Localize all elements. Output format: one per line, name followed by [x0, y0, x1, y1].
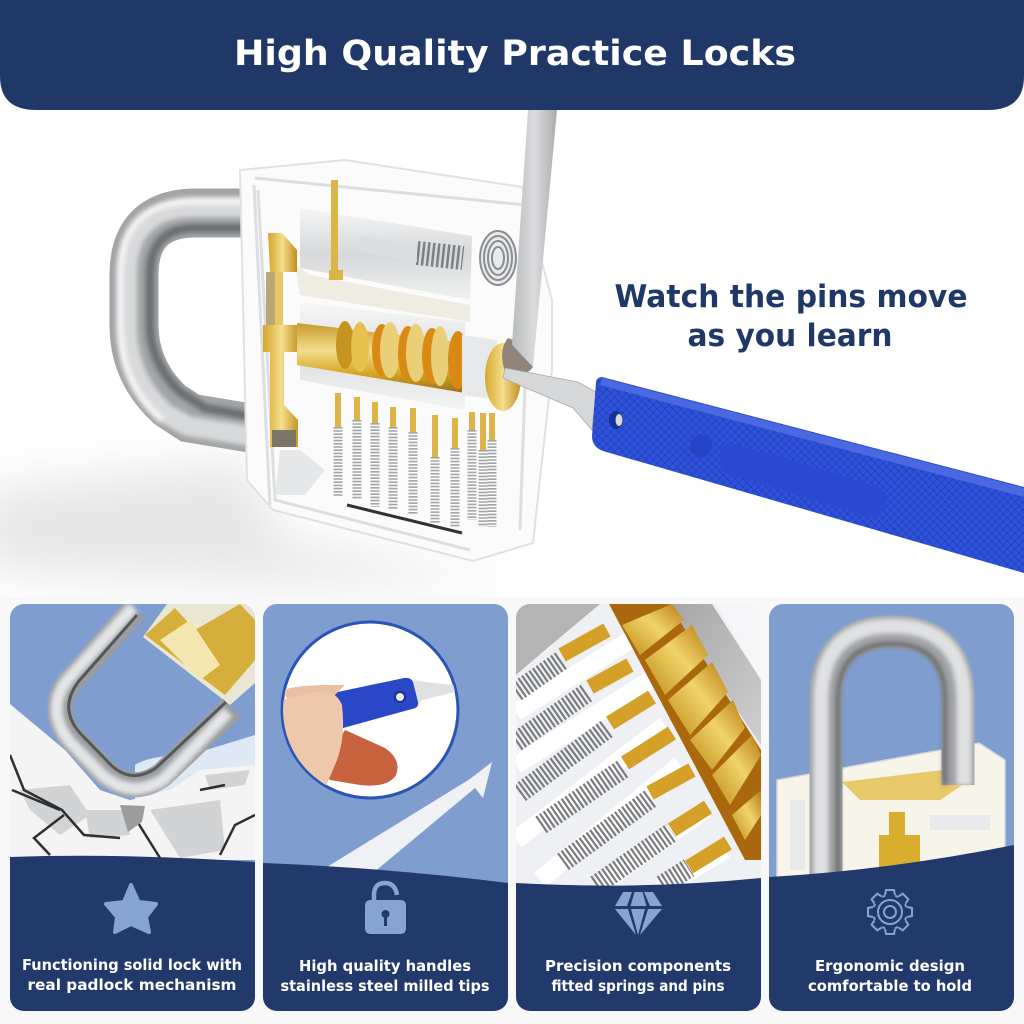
- broken rock: [10, 704, 255, 860]
- caption: ergonomic: [808, 957, 972, 995]
- back finger: [284, 684, 345, 699]
- white stripes: [516, 640, 725, 890]
- icon: gear: [868, 890, 912, 934]
- body inner rim: [254, 178, 530, 550]
- navy base: [263, 863, 508, 1011]
- gold pins: [562, 630, 728, 867]
- handle top highlight: [600, 378, 1024, 497]
- pins and springs: [338, 393, 492, 527]
- navy base: [10, 856, 255, 1011]
- padlock shackle: [120, 201, 250, 436]
- panel: ergonomic: [769, 604, 1014, 1011]
- cylinder face: [485, 343, 521, 411]
- index finger: [329, 730, 398, 786]
- clear lock body: [777, 743, 1005, 880]
- caption: solid lock: real padlock mechanism: [28, 976, 236, 994]
- panel: precision components: [516, 604, 761, 1011]
- panel: handles: [263, 604, 508, 1011]
- thumb: [282, 691, 343, 786]
- blue handle in hand: [333, 678, 418, 728]
- circle inset photo: [282, 622, 458, 798]
- gold top band: [842, 770, 962, 800]
- caption: precision: Precision components: [545, 957, 731, 975]
- pick blade: [512, 110, 557, 367]
- lock shadow: [0, 460, 520, 585]
- shackle: [821, 626, 964, 880]
- gold core: [609, 604, 761, 860]
- tension tool tip: [502, 338, 533, 374]
- caption: handles: stainless steel milled tips: [280, 977, 490, 995]
- caption: handles: High quality handles: [299, 957, 471, 975]
- vertical gold pin: [329, 180, 343, 280]
- icon: padlock: [365, 883, 406, 934]
- background gray wedges: [516, 604, 600, 675]
- distant cloud: [135, 735, 255, 800]
- caption: precision: fitted springs and pins: [552, 977, 725, 995]
- title: High Quality Practice Locks: [234, 34, 796, 74]
- milled blade arrow: [320, 762, 492, 873]
- caption: ergonomic: comfortable to hold: [808, 977, 972, 995]
- handle dimple: [690, 435, 712, 457]
- pin base bar: [347, 505, 462, 533]
- caption: precision: [545, 957, 731, 995]
- navy base: [769, 845, 1014, 1011]
- shackle: [56, 607, 232, 789]
- lock body fragment: [143, 604, 255, 705]
- caption: handles: [280, 957, 490, 995]
- pick tip in hand: [412, 680, 455, 706]
- callout subheading: as you learn: [688, 318, 892, 354]
- glass cylinder housing: [300, 302, 465, 410]
- navy base: [516, 878, 761, 1011]
- clear top chamber: [300, 208, 472, 300]
- gold plug: [879, 812, 920, 867]
- blue pick handle: [592, 377, 1024, 573]
- top spring: [360, 231, 516, 285]
- callout heading: Watch the pins move: [614, 279, 968, 315]
- shackle clamp: [120, 805, 145, 832]
- springs: [516, 660, 689, 885]
- header banner: [0, 0, 1024, 110]
- caption: solid lock: [22, 956, 242, 994]
- gold rings: [622, 604, 761, 840]
- icon: diamond: [615, 892, 662, 935]
- icon: star: [106, 885, 156, 932]
- caption: ergonomic: Ergonomic design: [815, 957, 965, 975]
- glass ring at keyway: [462, 335, 497, 400]
- gold linkage: [263, 233, 325, 495]
- padlock clear body: [240, 160, 552, 561]
- padlock illustration: [120, 110, 596, 561]
- gold cylinder: [297, 321, 468, 393]
- handle grip recess: [720, 443, 887, 516]
- handle hole: [609, 411, 623, 429]
- caption: solid lock: Functioning solid lock with: [22, 956, 242, 974]
- panel: solid lock: [10, 604, 255, 1011]
- pick shaft: [503, 368, 596, 430]
